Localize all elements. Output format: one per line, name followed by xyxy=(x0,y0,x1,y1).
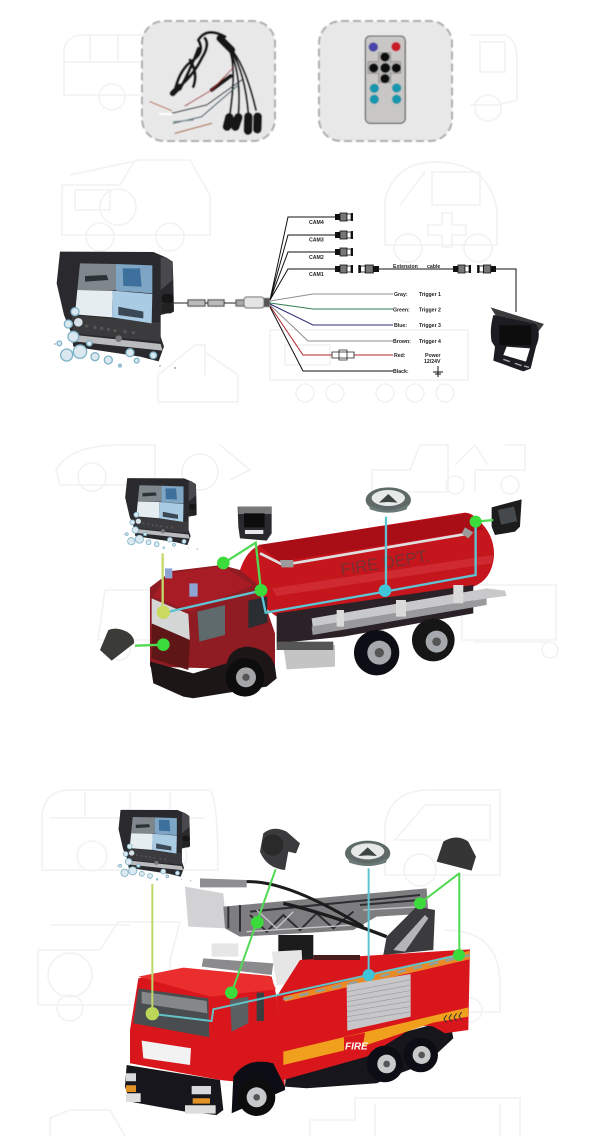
connection lines and nodes xyxy=(146,868,465,1021)
camera: dome xyxy=(366,487,411,513)
wiring labels: Black: xyxy=(393,369,409,375)
wiring labels: CAM4 xyxy=(309,220,324,226)
wiring labels: CAM2 xyxy=(309,255,324,261)
tanker truck body xyxy=(150,513,507,698)
wiring diagram xyxy=(54,213,544,376)
camera: rear xyxy=(492,499,522,535)
fire engine installation diagram xyxy=(117,810,476,1116)
camera: right side xyxy=(437,837,476,871)
wiring labels: Green: xyxy=(393,308,410,314)
wiring labels: Trigger 4 xyxy=(419,339,441,345)
monitor with water splash xyxy=(54,252,176,369)
monitor xyxy=(117,810,191,881)
camera: left side xyxy=(260,829,300,870)
wiring labels: Trigger 2 xyxy=(419,308,441,314)
icon: multi-branch cable harness xyxy=(150,32,258,133)
camera: side xyxy=(100,629,134,661)
cables from monitor to hub xyxy=(173,217,516,371)
icon: ground symbol xyxy=(433,366,443,376)
panel: cable accessory xyxy=(142,21,452,141)
wiring labels: Trigger 1 xyxy=(419,292,441,298)
fire engine xyxy=(125,878,470,1116)
wiring labels: Brown: xyxy=(393,339,411,345)
tanker truck body: FIRE DEPT. xyxy=(339,546,431,579)
wiring labels: Red: xyxy=(394,353,406,359)
wiring labels: 12/24V xyxy=(424,359,441,365)
fire engine: FIRE xyxy=(345,1041,368,1052)
wiring labels xyxy=(309,220,441,375)
wiring labels: Extension xyxy=(393,264,418,270)
wiring labels: CAM3 xyxy=(309,238,324,244)
icon: backup camera xyxy=(491,307,544,371)
tanker truck installation diagram xyxy=(100,478,522,698)
icon: remote control xyxy=(365,36,405,123)
wiring labels: CAM1 xyxy=(309,272,324,278)
wiring labels: Gray: xyxy=(394,292,408,298)
monitor xyxy=(124,478,198,550)
wiring labels: Power xyxy=(425,353,441,359)
wiring labels: Blue: xyxy=(394,323,407,329)
wiring labels: cable xyxy=(427,264,440,270)
connection lines and nodes xyxy=(135,516,493,651)
camera: top roof xyxy=(238,507,272,541)
wiring labels: Trigger 3 xyxy=(419,323,441,329)
camera: dome xyxy=(345,841,390,866)
connectors xyxy=(332,213,496,360)
